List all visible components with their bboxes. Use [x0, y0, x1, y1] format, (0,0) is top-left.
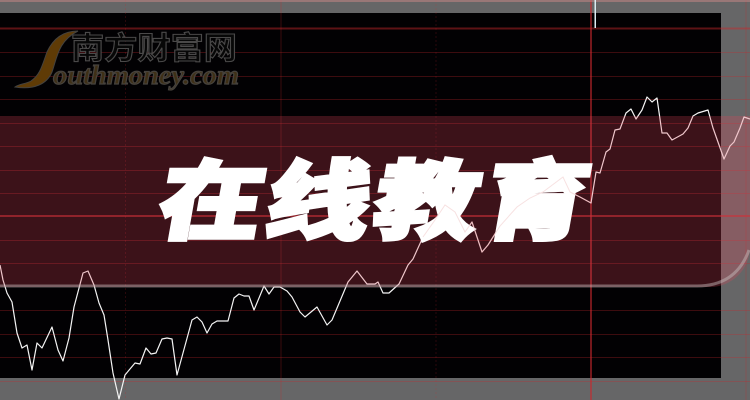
watermark logo: Southmoney: [15, 23, 239, 90]
translucent red title band: [0, 116, 750, 287]
logo Chinese name: 南方财富网: [71, 23, 237, 68]
icon: logo swoosh S: [15, 31, 78, 88]
stock line faint overlay across title: [423, 177, 591, 252]
stock price line: [0, 97, 750, 399]
title: 线: [258, 132, 383, 257]
band lower edge highlight: [0, 250, 749, 286]
title: [151, 132, 601, 257]
logo domain: outhmoney.com: [53, 60, 239, 90]
title: 在: [151, 132, 276, 257]
title: 育: [476, 132, 601, 257]
title: 教: [366, 132, 491, 257]
icon: white marker tick at top of chart: [594, 0, 596, 28]
